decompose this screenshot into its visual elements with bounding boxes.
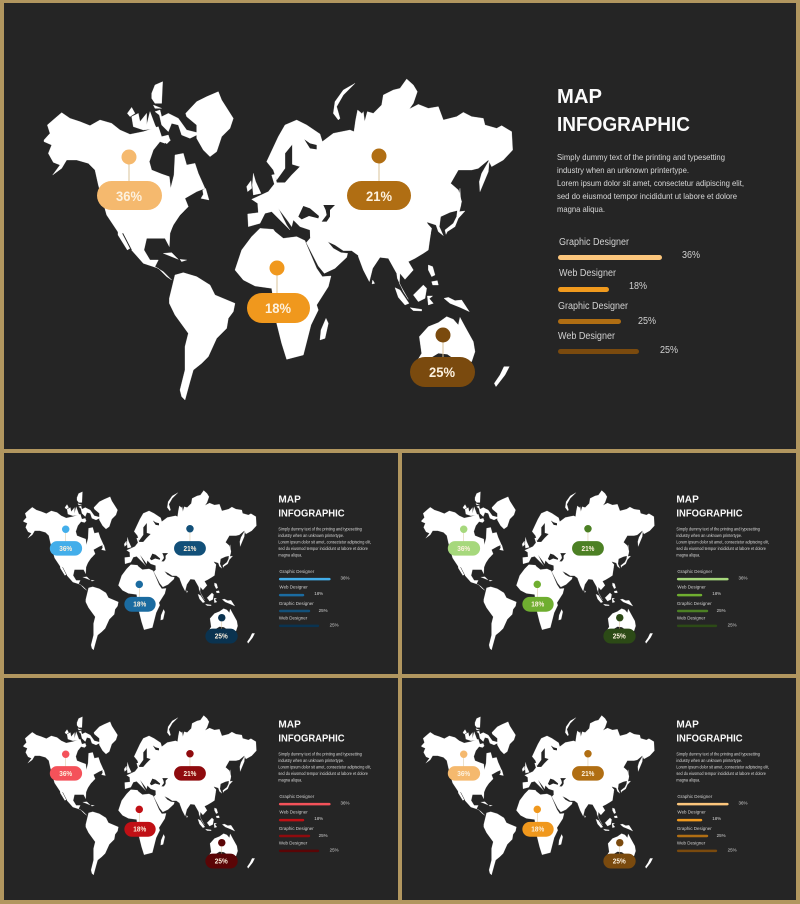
marker: Africa 18%: 18%	[133, 827, 146, 834]
bar chart	[677, 794, 748, 854]
body text: Simply dummy text of the printing and typesetting	[278, 527, 363, 532]
marker: North America 36%: 36%	[59, 771, 72, 778]
body text: magna aliqua.	[557, 204, 605, 214]
body text: magna aliqua.	[676, 778, 700, 783]
marker: Africa 18%	[247, 260, 310, 323]
bar chart	[677, 569, 748, 629]
marker: Australia 25%: 25%	[613, 634, 626, 641]
body text: industry when an unknown printertype.	[278, 533, 344, 538]
body text: Simply dummy text of the printing and typesetting	[278, 752, 363, 757]
bar chart: 18%	[629, 281, 647, 292]
body text: Lorem ipsum dolor sit amet, consectetur adipiscing elit,	[278, 765, 371, 770]
bar chart: 25%	[319, 833, 328, 839]
marker: Australia 25%: 25%	[215, 859, 228, 866]
bar chart: 25%	[728, 623, 737, 629]
marker: North America 36%: 36%	[59, 546, 72, 553]
body text: industry when an unknown printertype.	[676, 758, 742, 763]
title: MAP	[278, 494, 301, 505]
body text: Lorem ipsum dolor sit amet, consectetur adipiscing elit,	[278, 540, 371, 545]
body text: Simply dummy text of the printing and typesetting	[676, 752, 761, 757]
world map	[44, 79, 513, 400]
title	[278, 719, 345, 744]
panel: green map infographic	[402, 453, 796, 674]
bar chart: Web Designer	[677, 616, 706, 622]
body text: sed do eiusmod tempor incididunt ut labore et dolore	[278, 771, 368, 776]
body text: Simply dummy text of the printing and typesetting	[676, 527, 761, 532]
body text	[676, 527, 769, 558]
body text: industry when an unknown printertype.	[557, 165, 689, 175]
bar chart: Graphic Designer	[279, 601, 314, 607]
bar chart: 25%	[330, 623, 339, 629]
marker: Asia 21%: 21%	[582, 546, 594, 553]
bar chart: 36%	[739, 575, 748, 581]
body text: sed do eiusmod tempor incididunt ut labore et dolore	[278, 546, 368, 551]
marker: Australia 25%	[603, 839, 636, 869]
bar chart: Graphic Designer	[677, 569, 713, 575]
bar chart: Graphic Designer	[677, 826, 712, 832]
marker: Africa 18%: 18%	[531, 602, 544, 609]
marker: North America 36%	[50, 751, 82, 781]
bar chart: Web Designer	[677, 584, 706, 590]
bar chart: Web Designer	[279, 584, 308, 590]
body text: magna aliqua.	[676, 553, 700, 558]
world map	[23, 715, 256, 875]
marker: Asia 21%	[174, 750, 206, 781]
bar chart: 25%	[717, 833, 726, 839]
bar chart: Graphic Designer	[558, 301, 629, 312]
marker: Asia 21%	[572, 750, 604, 781]
title: MAP	[278, 719, 301, 730]
marker: North America 36%: 36%	[457, 771, 470, 778]
marker: Australia 25%: 25%	[613, 859, 626, 866]
bar chart: Graphic Designer	[279, 569, 315, 575]
bar chart: Web Designer	[279, 616, 308, 622]
body text: sed do eiusmod tempor incididunt ut labore et dolore	[557, 191, 737, 201]
marker: North America 36%	[448, 751, 480, 781]
bar chart: 25%	[660, 345, 678, 356]
body text	[557, 152, 744, 214]
bar chart: Web Designer	[558, 331, 616, 342]
body text: sed do eiusmod tempor incididunt ut labore et dolore	[676, 771, 766, 776]
title	[278, 494, 345, 519]
marker: Asia 21%: 21%	[366, 188, 393, 204]
marker: Africa 18%: 18%	[265, 300, 292, 316]
body text: sed do eiusmod tempor incididunt ut labore et dolore	[676, 546, 766, 551]
body text: magna aliqua.	[278, 778, 302, 783]
title: MAP	[557, 86, 602, 108]
marker: Asia 21%	[572, 525, 604, 556]
body text	[278, 752, 371, 783]
bar chart: 36%	[341, 575, 350, 581]
body text: Lorem ipsum dolor sit amet, consectetur adipiscing elit,	[676, 765, 769, 770]
bar chart: 25%	[717, 608, 726, 614]
bar chart	[558, 237, 700, 356]
title: INFOGRAPHIC	[676, 733, 743, 744]
panel: blue map infographic	[4, 453, 398, 674]
title: MAP	[676, 719, 699, 730]
body text: Lorem ipsum dolor sit amet, consectetur adipiscing elit,	[676, 540, 769, 545]
body text: industry when an unknown printertype.	[278, 758, 344, 763]
body text: Simply dummy text of the printing and typesetting	[557, 152, 725, 162]
bar chart	[279, 794, 350, 854]
marker: Africa 18%	[522, 581, 554, 612]
marker: Africa 18%	[124, 581, 156, 612]
title: INFOGRAPHIC	[278, 508, 345, 519]
bar chart: 25%	[319, 608, 328, 614]
bar chart: 18%	[314, 816, 324, 822]
bar chart: 25%	[638, 316, 656, 327]
bar chart	[279, 569, 350, 629]
bar chart: Web Designer	[677, 841, 706, 847]
world map	[421, 715, 654, 875]
panel: main orange map infographic	[4, 3, 796, 449]
marker: Australia 25%	[603, 614, 636, 644]
bar chart: Graphic Designer	[677, 794, 713, 800]
bar chart: Web Designer	[559, 268, 617, 279]
bar chart: 36%	[341, 800, 350, 806]
bar chart: Web Designer	[279, 841, 308, 847]
marker: North America 36%	[448, 526, 480, 556]
marker: Africa 18%	[124, 806, 156, 837]
bar chart: Graphic Designer	[559, 237, 630, 248]
bar chart: 25%	[330, 848, 339, 854]
title: MAP	[676, 494, 699, 505]
bar chart: Graphic Designer	[677, 601, 712, 607]
bar chart: 18%	[712, 591, 722, 597]
marker: North America 36%: 36%	[116, 188, 143, 204]
bar chart: 25%	[728, 848, 737, 854]
bar chart: 36%	[739, 800, 748, 806]
bar chart: Web Designer	[279, 809, 308, 815]
body text: Lorem ipsum dolor sit amet, consectetur adipiscing elit,	[557, 178, 744, 188]
bar chart: 18%	[314, 591, 324, 597]
marker: North America 36%	[97, 150, 162, 210]
body text: magna aliqua.	[278, 553, 302, 558]
bar chart: 36%	[682, 250, 700, 261]
marker: Africa 18%: 18%	[133, 602, 146, 609]
marker: Australia 25%	[205, 614, 238, 644]
body text	[676, 752, 769, 783]
marker: North America 36%	[50, 526, 82, 556]
marker: Australia 25%	[205, 839, 238, 869]
title	[557, 86, 690, 136]
world map	[421, 490, 654, 650]
panel: red map infographic	[4, 678, 398, 900]
world map	[23, 490, 256, 650]
marker: Africa 18%: 18%	[531, 827, 544, 834]
marker: Asia 21%	[174, 525, 206, 556]
body text: industry when an unknown printertype.	[676, 533, 742, 538]
title	[676, 719, 743, 744]
marker: Australia 25%: 25%	[429, 364, 456, 380]
marker: Africa 18%	[522, 806, 554, 837]
marker: Asia 21%: 21%	[184, 771, 196, 778]
bar chart: Web Designer	[677, 809, 706, 815]
marker: Australia 25%: 25%	[215, 634, 228, 641]
bar chart: Graphic Designer	[279, 826, 314, 832]
title: INFOGRAPHIC	[278, 733, 345, 744]
bar chart: Graphic Designer	[279, 794, 315, 800]
marker: Asia 21%	[347, 148, 411, 210]
bar chart: 18%	[712, 816, 722, 822]
marker: Australia 25%	[410, 328, 475, 387]
marker: North America 36%: 36%	[457, 546, 470, 553]
panel: orange small map infographic	[402, 678, 796, 900]
marker: Asia 21%: 21%	[582, 771, 594, 778]
marker: Asia 21%: 21%	[184, 546, 196, 553]
title: INFOGRAPHIC	[676, 508, 743, 519]
title: INFOGRAPHIC	[557, 114, 690, 136]
title	[676, 494, 743, 519]
body text	[278, 527, 371, 558]
